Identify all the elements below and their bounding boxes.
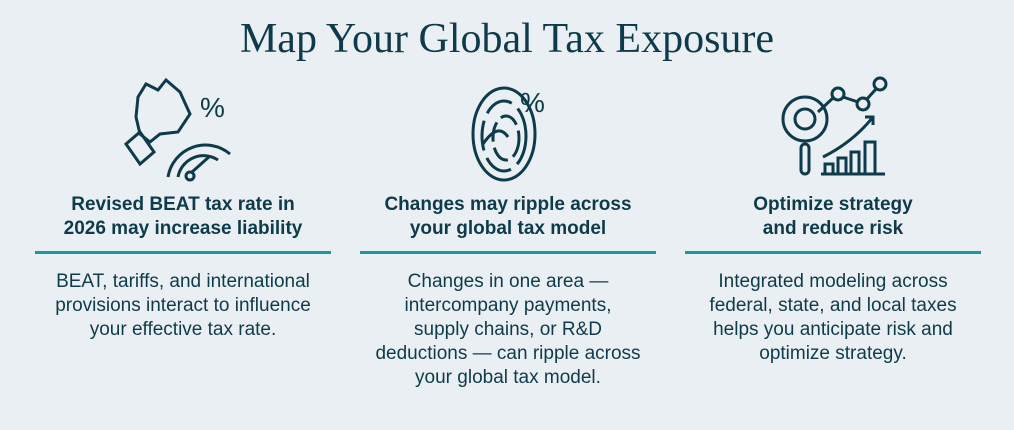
divider (360, 251, 656, 254)
heading (384, 194, 632, 239)
icon: ripple: % (520, 87, 545, 118)
heading: Optimize strategy (753, 194, 913, 215)
body: helps you anticipate risk and (713, 319, 953, 340)
body: BEAT, tariffs, and international (56, 271, 310, 292)
icon: fist and gauge (124, 78, 231, 182)
body: Integrated modeling across (718, 271, 948, 292)
panel: BEAT (35, 78, 331, 340)
body (55, 271, 311, 340)
heading: 2026 may increase liability (64, 218, 302, 239)
body: optimize strategy. (759, 343, 907, 364)
divider (685, 251, 981, 254)
divider (35, 251, 331, 254)
body: provisions interact to influence (55, 295, 311, 316)
body: supply chains, or R&D (414, 319, 602, 340)
body (375, 271, 641, 388)
heading: Changes may ripple across (384, 194, 632, 215)
heading: and reduce risk (763, 218, 903, 239)
body: your global tax model. (415, 367, 601, 388)
body: federal, state, and local taxes (709, 295, 957, 316)
heading: your global tax model (410, 218, 606, 239)
icon: fist and gauge: % (200, 92, 225, 123)
body: intercompany payments, (404, 295, 612, 316)
body (709, 271, 957, 364)
icon: ripple (472, 86, 545, 182)
icon: magnifier chart (782, 76, 888, 176)
panel: ripple (360, 86, 656, 388)
heading (64, 194, 302, 239)
heading (753, 194, 913, 239)
body: deductions — can ripple across (375, 343, 641, 364)
body: Changes in one area — (408, 271, 608, 292)
body: your effective tax rate. (90, 319, 276, 340)
panel: optimize (685, 76, 981, 364)
heading: Revised BEAT tax rate in (71, 194, 295, 215)
title: Map Your Global Tax Exposure (240, 16, 774, 62)
